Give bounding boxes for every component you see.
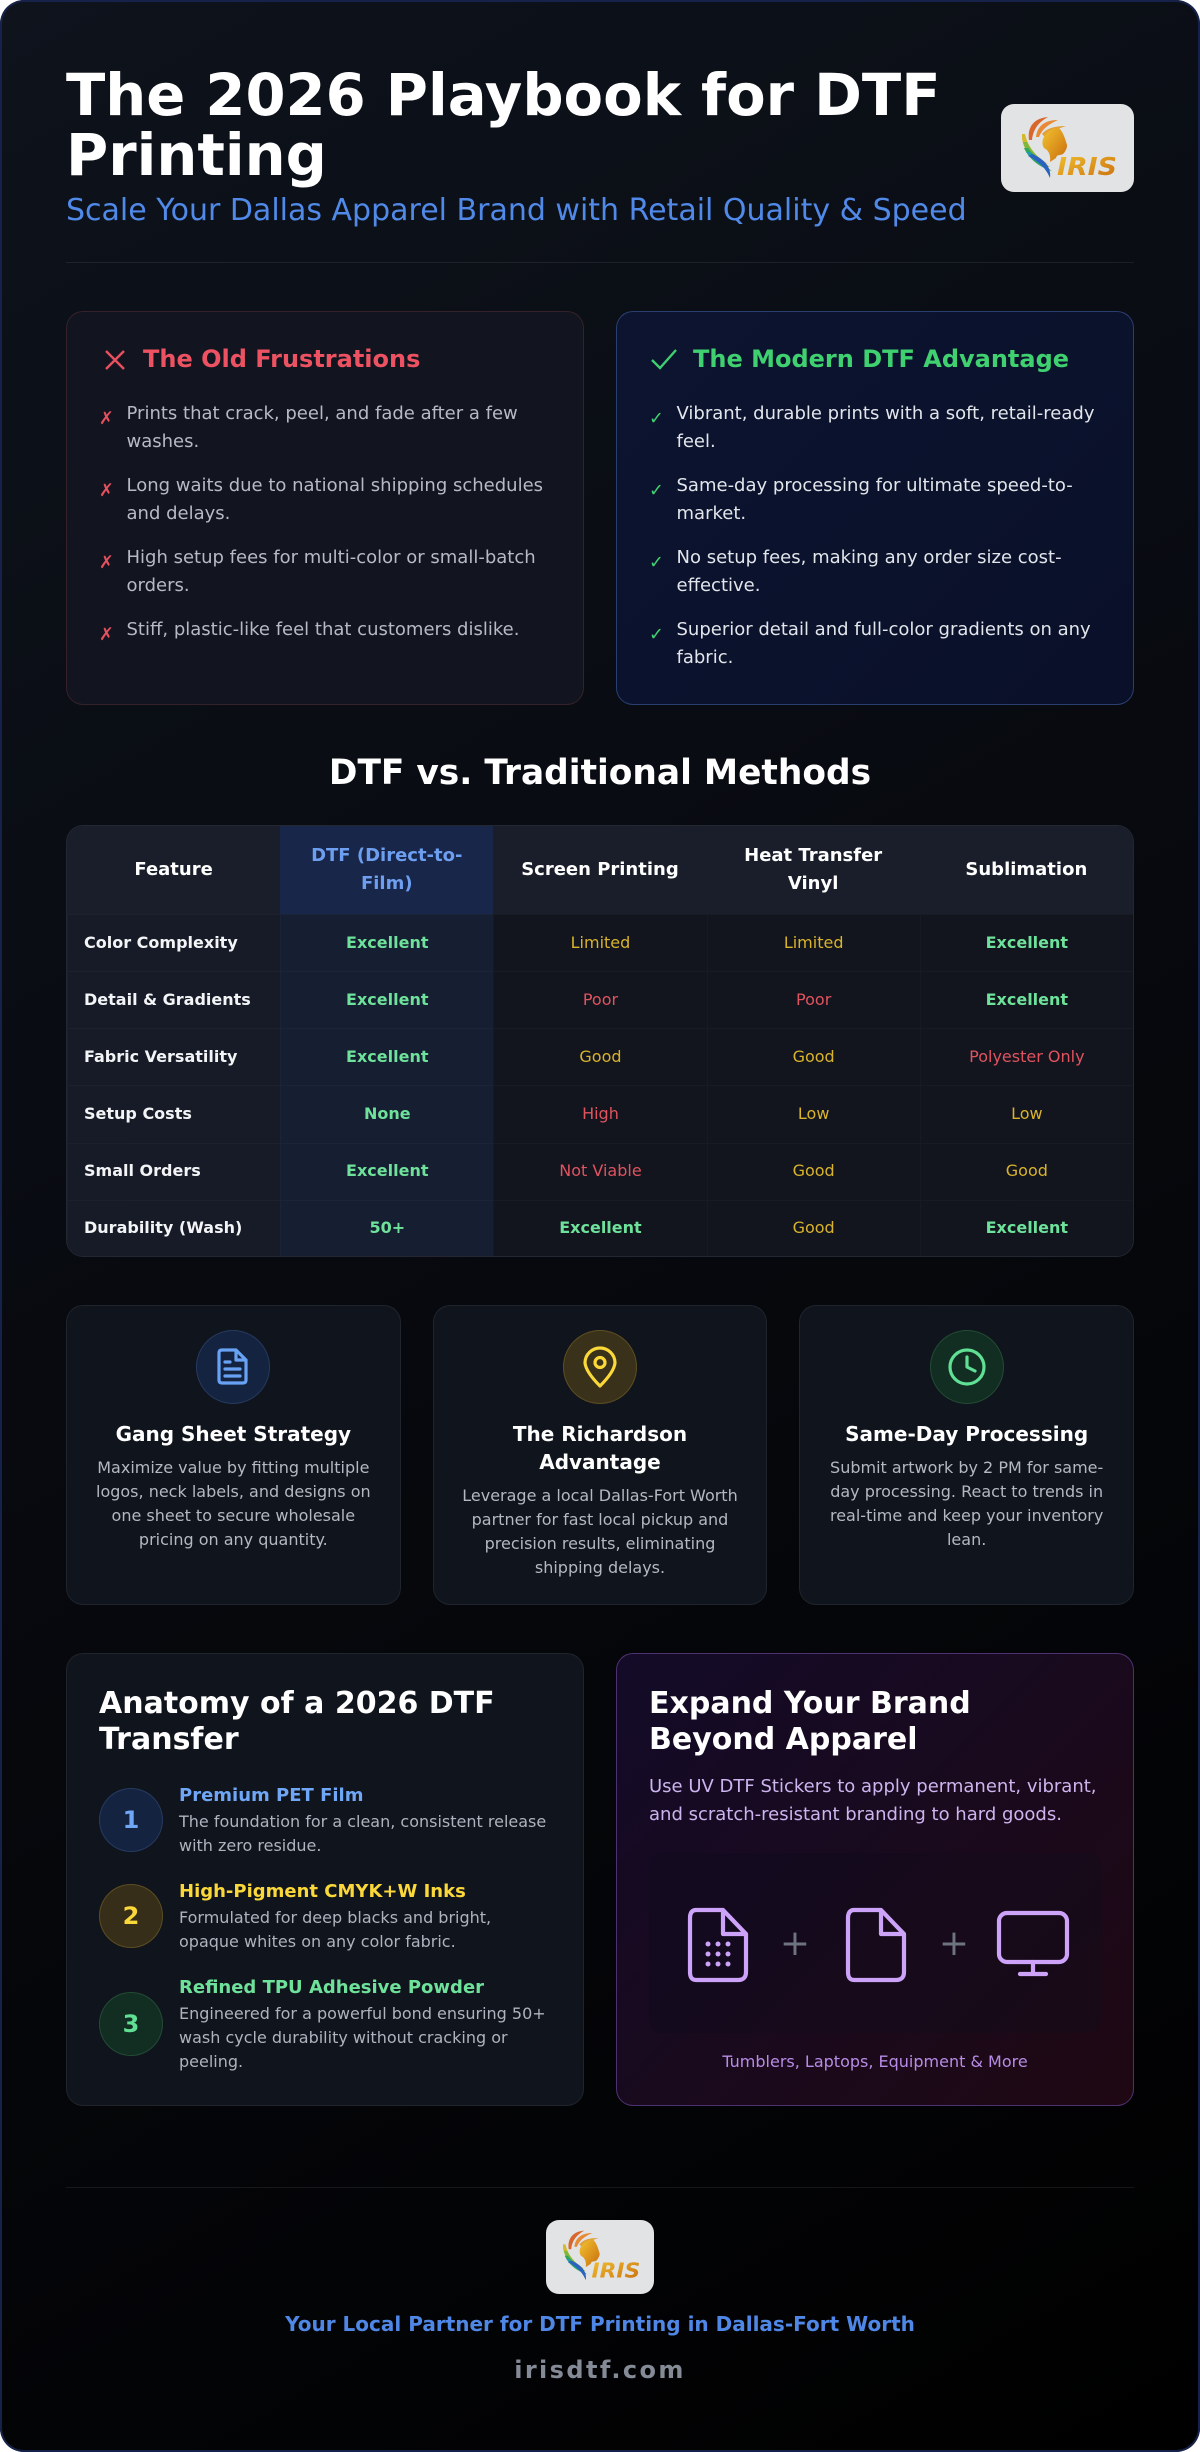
heading: Anatomy of a 2026 DTF [99,1686,495,1721]
comparison table: Poor [796,990,831,1009]
heading [649,1686,971,1757]
list: frustrations [99,403,543,645]
list: advantages: fabric. [676,647,733,668]
step 2: 2 [123,1902,139,1930]
description: day processing. React to trends in [830,1482,1103,1500]
comparison table: Polyester Only [969,1047,1085,1066]
list: frustrations: Prints that crack, peel, and fade after a few [126,403,518,424]
comparison table: None [364,1104,411,1123]
comparison table: Excellent [986,933,1068,952]
comparison table: Setup Costs [84,1104,192,1123]
list: advantages [649,403,1094,668]
comparison table: Excellent [346,990,428,1009]
heading: modern DTF advantage: The Modern DTF Advantage [693,345,1069,373]
description: partner for fast local pickup and [472,1510,728,1528]
step 3 [99,1976,546,2070]
icon: sticker sheet [688,1908,748,1982]
description: Maximize value by fitting multiple [97,1458,369,1476]
comparison table: Screen Printing [521,859,679,880]
step 2: High-Pigment CMYK+W Inks [179,1881,466,1902]
description: one sheet to secure wholesale [112,1506,355,1524]
comparison table: High [582,1104,619,1123]
comparison table: Low [798,1104,829,1123]
icon row [649,1853,1101,2033]
description: precision results, eliminating [485,1534,715,1552]
comparison table: Excellent [346,933,428,952]
step 1: Premium PET Film [179,1785,363,1806]
list: advantages: Superior detail and full-color gradients on any [676,619,1091,640]
list: frustrations: ✗ [99,625,114,645]
comparison table: Poor [583,990,618,1009]
comparison table [66,825,1134,1257]
icon: IRIS logo footer: IRIS [591,2259,640,2283]
heading: comparison: DTF vs. Traditional Methods [329,753,871,793]
title: The 2026 Playbook for DTF [66,62,941,129]
list: frustrations: orders. [126,575,190,596]
comparison table: Fabric Versatility [84,1047,237,1066]
description: real-time and keep your inventory [830,1506,1103,1524]
panel: anatomy of a transfer [66,1653,584,2106]
comparison table: Excellent [986,1218,1068,1237]
list: advantages: effective. [676,575,760,596]
comparison table: Limited [784,933,843,952]
title: Printing [66,122,327,189]
description: Leverage a local Dallas-Fort Worth [462,1486,738,1504]
step 1: 1 [123,1806,139,1834]
comparison table: Color Complexity [84,933,238,952]
list: advantages: ✓ [649,625,664,645]
comparison table: Excellent [986,990,1068,1009]
icon: map pin [563,1330,637,1404]
list: frustrations: ✗ [99,409,114,429]
plus: + [939,1923,969,1964]
description [649,1776,1097,1825]
heading [99,1686,495,1757]
heading: old frustrations: The Old Frustrations [143,345,420,373]
comparison table: Heat Transfer [744,845,882,866]
footer tagline: Your Local Partner for DTF Printing in Dallas-Fort Worth [285,2312,915,2336]
heading [512,1422,687,1474]
step 2: opaque whites on any color fabric. [179,1932,456,1950]
icon: cross [105,350,125,370]
card: gang sheet strategy [66,1305,401,1605]
description [96,1458,371,1548]
heading: Advantage [539,1450,661,1474]
description: Submit artwork by 2 PM for same- [830,1458,1103,1476]
description: logos, neck labels, and designs on [96,1482,371,1500]
step 3: peeling. [179,2052,243,2070]
comparison table: Sublimation [965,859,1087,880]
plus: + [780,1923,810,1964]
panel: old frustrations [66,311,584,705]
comparison table: Excellent [346,1047,428,1066]
heading: Expand Your Brand [649,1686,971,1721]
comparison table: Small Orders [84,1161,201,1180]
icon: IRIS logo header [1001,104,1134,192]
icon: IRIS logo header: IRIS [1057,152,1117,181]
list: advantages: feel. [676,431,716,452]
comparison table: 50+ [369,1218,405,1237]
comparison table: Excellent [559,1218,642,1237]
comparison table: Film) [361,873,413,894]
list: advantages: ✓ [649,481,664,501]
card: Richardson advantage [433,1305,767,1605]
heading: Gang Sheet Strategy [116,1422,351,1446]
heading: The Richardson [513,1422,687,1446]
step 2 [99,1881,491,1950]
comparison table: Good [793,1047,835,1066]
icon: document [196,1330,270,1404]
icon: check [651,349,677,370]
list: frustrations: and delays. [126,503,230,524]
icon: clock [930,1330,1004,1404]
step 1: The foundation for a clean, consistent release [179,1812,546,1831]
list: frustrations: High setup fees for multi-color or small-batch [126,547,536,568]
heading: Beyond Apparel [649,1722,918,1757]
comparison table: Low [1011,1104,1043,1123]
comparison table: Good [579,1047,622,1066]
subtitle: Scale Your Dallas Apparel Brand with Retail Quality & Speed [66,193,967,228]
comparison table: Detail & Gradients [84,990,251,1009]
heading: Same-Day Processing [845,1422,1088,1446]
description [462,1486,738,1576]
list: frustrations: Long waits due to national shipping schedules [126,475,543,496]
list: frustrations: Stiff, plastic-like feel that customers dislike. [126,619,519,640]
step 1: with zero residue. [179,1836,321,1855]
list: advantages: Vibrant, durable prints with a soft, retail-ready [676,403,1094,424]
list: frustrations: ✗ [99,481,114,501]
heading: Transfer [99,1722,239,1757]
title [66,62,941,189]
icon: monitor [996,1910,1070,1976]
description: shipping delays. [535,1558,665,1576]
card: same-day processing [799,1305,1134,1605]
comparison table: Vinyl [788,873,838,894]
panel: expand your brand [616,1653,1134,2106]
comparison table: Feature [134,859,213,880]
list: frustrations: washes. [126,431,199,452]
icon: document [846,1908,906,1982]
description: lean. [947,1530,986,1548]
step 1 [99,1785,546,1855]
list: advantages: Same-day processing for ultimate speed-to- [676,475,1073,496]
comparison table: Good [793,1161,835,1180]
list: frustrations: ✗ [99,553,114,573]
panel: modern DTF advantage [616,311,1134,705]
comparison table: Not Viable [559,1161,642,1180]
list: advantages: No setup fees, making any order size cost- [676,547,1062,568]
step 3: 3 [123,2010,139,2038]
description: Use UV DTF Stickers to apply permanent, vibrant, [649,1776,1097,1797]
step 2: Formulated for deep blacks and bright, [179,1908,491,1926]
footer website: irisdtf.com [514,2356,686,2384]
step 3: Refined TPU Adhesive Powder [179,1976,484,1998]
list: advantages: ✓ [649,553,664,573]
comparison table: Limited [571,933,630,952]
comparison table: Good [793,1218,835,1237]
comparison table: Durability (Wash) [84,1218,242,1237]
comparison table: Excellent [346,1161,428,1180]
step 3: wash cycle durability without cracking or [179,2028,508,2046]
step 3: Engineered for a powerful bond ensuring 50+ [179,2004,546,2022]
list: advantages: ✓ [649,409,664,429]
description [830,1458,1103,1548]
description: pricing on any quantity. [139,1530,328,1548]
comparison table: DTF (Direct-to- [311,845,462,866]
comparison table: Good [1006,1161,1048,1180]
caption: Tumblers, Laptops, Equipment & More [722,2052,1028,2070]
list: advantages: market. [676,503,746,524]
icon: IRIS logo footer [546,2220,654,2294]
description: and scratch-resistant branding to hard goods. [649,1804,1062,1825]
